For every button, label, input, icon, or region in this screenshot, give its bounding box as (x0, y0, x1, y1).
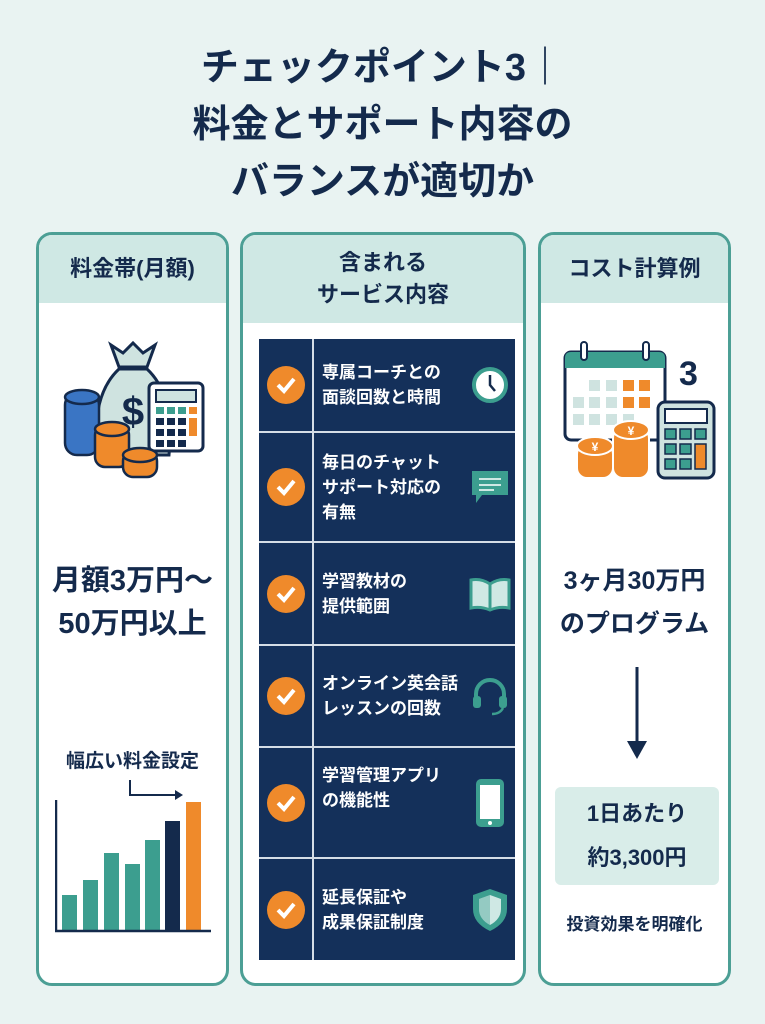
text: clarify ROI: 投資効果を明確化 (566, 915, 702, 934)
heading: price (39, 235, 226, 303)
row: chat: 有無 (322, 502, 356, 522)
row: guarantee: 成果保証制度 (322, 912, 424, 932)
icon: money bag calculator (64, 341, 204, 478)
panel: price range (36, 232, 229, 986)
row: guarantee: 延長保証や (322, 888, 407, 906)
row: guarantee (267, 859, 507, 960)
icon: calendar coins calculator (564, 341, 716, 480)
callout: per day: 1日あたり (587, 801, 687, 826)
row: materials: 学習教材の (322, 572, 407, 590)
heading: services: サービス内容 (317, 282, 449, 307)
row: materials: 提供範囲 (322, 596, 390, 616)
row: app (259, 748, 515, 859)
icon: calendar coins calculator: 3 (679, 355, 698, 393)
title: チェックポイント3｜ (201, 47, 564, 89)
heading: services: 含まれる (339, 250, 427, 275)
text: 3 months program (560, 567, 709, 638)
text: price range: 月額3万円〜 (52, 565, 213, 597)
arrow: down (627, 667, 647, 759)
text: price range (52, 565, 213, 640)
row: lessons: オンライン英会話 (322, 674, 458, 693)
row: app: 学習管理アプリ (322, 766, 441, 784)
title: 料金とサポート内容の (192, 104, 572, 146)
row: materials (259, 543, 515, 646)
title (192, 46, 572, 203)
callout: per day (555, 787, 719, 885)
panel: cost example (538, 232, 731, 986)
heading: cost (541, 235, 728, 303)
heading: price: 料金帯(月額) (70, 256, 195, 281)
text: 3 months program: のプログラム (560, 610, 709, 638)
bar chart (55, 780, 211, 932)
row: chat: サポート対応の (322, 478, 441, 496)
text: price range: 50万円以上 (58, 608, 207, 640)
heading: services (243, 235, 523, 323)
row: chat: 毎日のチャット (322, 452, 441, 472)
icon: money bag calculator: $ (122, 390, 144, 434)
row: coach: 面談回数と時間 (322, 388, 441, 407)
row: lessons (259, 646, 515, 748)
row: coach (259, 339, 515, 433)
heading: cost: コスト計算例 (568, 256, 700, 281)
row: chat (259, 433, 515, 543)
panel: services (240, 232, 526, 986)
row: lessons: レッスンの回数 (322, 699, 441, 718)
text: 3 months program: 3ヶ月30万円 (564, 567, 705, 595)
row: app: の機能性 (322, 790, 390, 810)
icon: calendar coins calculator: ¥ (628, 424, 635, 438)
icon: calendar coins calculator: ¥ (592, 440, 599, 454)
text: wide pricing: 幅広い料金設定 (66, 751, 199, 772)
callout: per day: 約3,300円 (587, 845, 687, 870)
row: coach: 専属コーチとの (322, 363, 441, 382)
service table (259, 339, 515, 960)
title: バランスが適切か (231, 161, 534, 203)
